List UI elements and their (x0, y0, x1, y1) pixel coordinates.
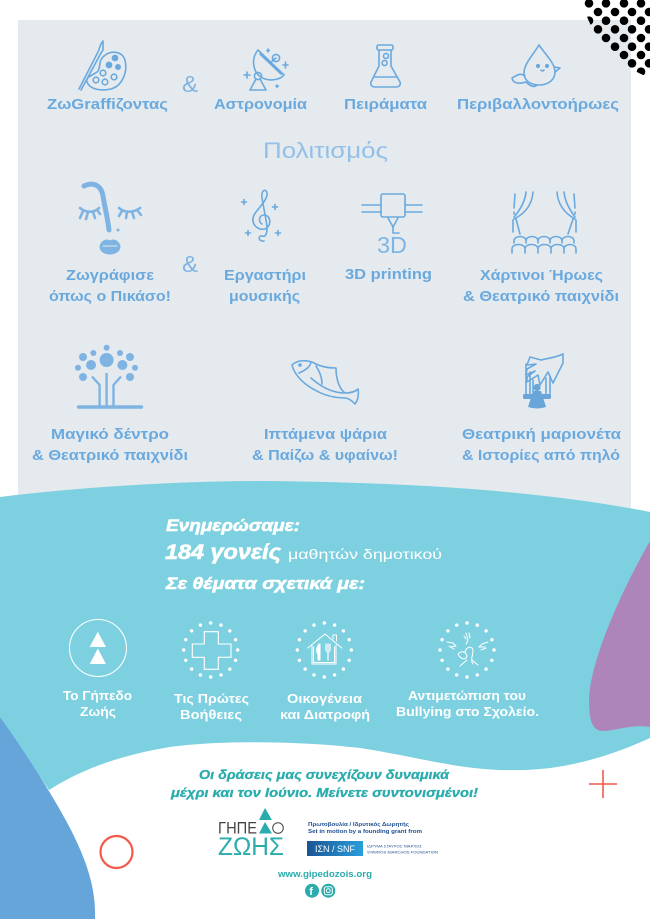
row 2 labels: & Θεατρικό παιχνίδι (463, 289, 619, 305)
row 2 labels (49, 267, 619, 305)
panel: teal wave (0, 481, 650, 790)
logo: Gipedo Zois (218, 808, 284, 861)
topic labels: Ζωής (80, 705, 116, 719)
heading row 1 labels (47, 97, 619, 113)
icon: theatre stage (512, 192, 576, 253)
icon: facebook: f (309, 886, 313, 898)
icon: facebook (305, 884, 319, 898)
icon: flying fish (292, 361, 358, 404)
icon: 3D printer (362, 194, 422, 258)
icon: treble clef (242, 190, 280, 241)
heading row 1 labels: Αστρονομία (214, 97, 307, 113)
heading row 1 labels: ΖωGraffiζοντας (47, 97, 168, 113)
logo: SNF: ΙΣΝ / SNF (315, 844, 355, 854)
icon: water drop hero (512, 45, 560, 86)
logo: SNF (307, 841, 438, 856)
parents headline: Σε θέματα σχετικά με: (165, 574, 365, 593)
icon: instagram (321, 884, 335, 898)
row 2 labels: όπως ο Πικάσο! (49, 289, 171, 305)
shape: red cross (589, 770, 617, 798)
closing message (170, 767, 479, 800)
topic labels: και Διατροφή (280, 708, 370, 722)
website: www.gipedozois.org (277, 869, 372, 880)
icon: Gipedo Zois (70, 620, 126, 676)
icon: first aid cross (182, 621, 239, 679)
topic labels: Βοήθειες (180, 708, 242, 722)
icon: satellite dish (244, 49, 288, 90)
icon: family house (296, 621, 353, 679)
topic labels: Αντιμετώπιση του (408, 689, 526, 703)
logo: Gipedo Zois: ΓΗΠΕ (218, 818, 257, 838)
topic labels (63, 689, 539, 722)
row 2 labels: Ζωγράφισε (66, 268, 154, 284)
closing message: Οι δράσεις μας συνεχίζουν δυναμικά (199, 767, 450, 782)
row 2 labels: 3D printing (345, 267, 432, 283)
topic labels: Τις Πρώτες (174, 692, 249, 706)
icon: bullying (438, 621, 496, 679)
row 3 labels: & Θεατρικό παιχνίδι (32, 448, 188, 464)
panel: activities background (18, 20, 631, 515)
parents headline: 184 γονείς (165, 541, 282, 564)
shape: purple wave (589, 541, 650, 731)
heading row 1 labels: Πειράματα (344, 97, 427, 113)
logo: SNF: ΙΔΡΥΜΑ ΣΤΑΥΡΟΣ ΝΙΑΡΧΟΣ (367, 844, 423, 848)
row 3 labels: & Ιστορίες από πηλό (462, 448, 620, 464)
topic labels: Οικογένεια (287, 692, 362, 706)
ampersand 1: & (182, 71, 198, 97)
row 3 labels (32, 427, 621, 464)
row 3 labels: & Παίζω & υφαίνω! (252, 448, 398, 464)
row 3 labels: Θεατρική μαριονέτα (462, 427, 621, 443)
icon: palette and brush (79, 41, 126, 90)
ampersand 2: & (182, 251, 198, 277)
icon: Picasso face (80, 184, 141, 254)
icon: 3D printer: 3D (377, 232, 407, 258)
topic labels: Bullying στο Σχολείο. (396, 705, 539, 719)
row 2 labels: μουσικής (229, 289, 300, 305)
logo: Gipedo Zois: ΖΩΗΣ (218, 833, 284, 861)
parents headline (165, 516, 442, 593)
sponsor credit text (308, 822, 422, 835)
sponsor credit text: Πρωτοβουλία / Ιδρυτικός Δωρητής (308, 822, 409, 828)
shape: blue wave (0, 717, 95, 919)
row 3 labels: Μαγικό δέντρο (51, 427, 169, 443)
row 3 labels: Ιπτάμενα ψάρια (264, 427, 387, 443)
parents headline: μαθητών δημοτικού (288, 546, 442, 562)
icon: magic tree (75, 345, 142, 407)
row 2 labels: Χάρτινοι Ήρωες (480, 268, 603, 284)
icon: puppet hand (523, 354, 563, 408)
logo: SNF: STAVROS NIARCHOS FOUNDATION (367, 850, 438, 854)
shape: red circle (100, 836, 132, 868)
topic labels: Το Γήπεδο (63, 689, 132, 703)
icon: flask (371, 45, 400, 87)
heading row 1 labels: Περιβαλλοντοήρωες (457, 97, 619, 113)
sponsor credit text: Set in motion by a founding grant from (308, 829, 422, 835)
parents headline: Ενημερώσαμε: (166, 516, 300, 535)
row 2 labels: Εργαστήρι (224, 268, 306, 284)
halftone dot pattern (585, 0, 650, 76)
closing message: μέχρι και τον Ιούνιο. Μείνετε συντονισμένοι! (170, 785, 479, 800)
heading: culture: Πολιτισμός (263, 138, 388, 163)
